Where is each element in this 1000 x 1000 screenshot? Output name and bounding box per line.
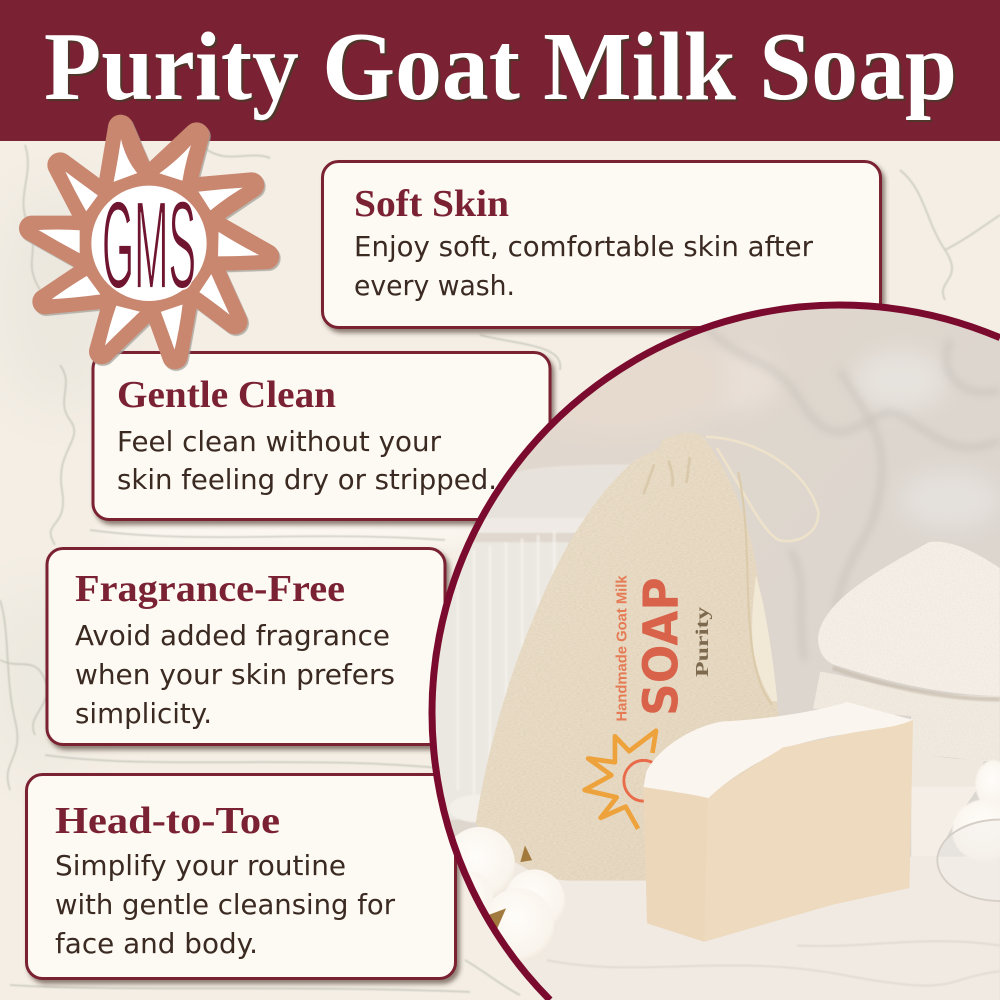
logo rays [32,127,267,357]
towel shadow [833,668,1000,699]
card: Gentle Clean [93,352,550,520]
card: Head-to-Toe [26,774,456,978]
card: Soft Skin: Soft Skin [354,183,509,225]
towel: top [818,542,1000,696]
card: Head-to-Toe: Head-to-Toe [55,800,280,842]
card: Gentle Clean: Feel clean without your [117,426,442,458]
drawstring bag [476,433,818,881]
logo: GMS sun: GMS [102,177,196,315]
card: Soft Skin: Enjoy soft, comfortable skin after [354,231,814,263]
card: Gentle Clean: Gentle Clean [117,374,336,416]
glass jar [429,464,640,823]
towel: third [912,755,984,786]
title: Purity Goat Milk Soap [46,15,959,122]
card: Fragrance-Free [47,548,445,744]
table [494,856,1000,1000]
card: Fragrance-Free: Avoid added fragrance [75,620,390,652]
card: Gentle Clean: skin feeling dry or stripped. [117,464,497,496]
card: Fragrance-Free: Fragrance-Free [75,568,345,610]
logo outline [32,127,267,357]
title band [0,0,1000,141]
logo disc [91,186,207,301]
towels [813,542,1000,857]
cotton boll [455,827,564,957]
card: Head-to-Toe: with gentle cleansing for [55,889,396,921]
card: Head-to-Toe: face and body. [55,928,258,960]
logo: GMS sun [32,127,267,357]
card: Soft Skin: every wash. [354,270,515,302]
card: Head-to-Toe: Simplify your routine [55,850,346,882]
wall marble [700,320,1000,660]
soap bar [643,702,913,942]
title: Purity Goat Milk Soap [44,13,957,120]
bag print [585,575,712,829]
photo scene, drawn in scaled coordinates [419,433,1000,1000]
photo ring [432,305,1000,1000]
bag print: SOAP [632,577,689,716]
card: Fragrance-Free: when your skin prefers [75,659,395,691]
towel: cloth [911,786,979,857]
bag print: Handmade Goat Milk [614,575,630,722]
towel: second [813,672,1000,762]
cotton and glass dish [937,760,1000,901]
product photo [419,300,1000,1000]
card: Soft Skin [322,162,880,328]
card: Fragrance-Free: simplicity. [75,698,212,730]
bag print: Purity [692,607,712,677]
